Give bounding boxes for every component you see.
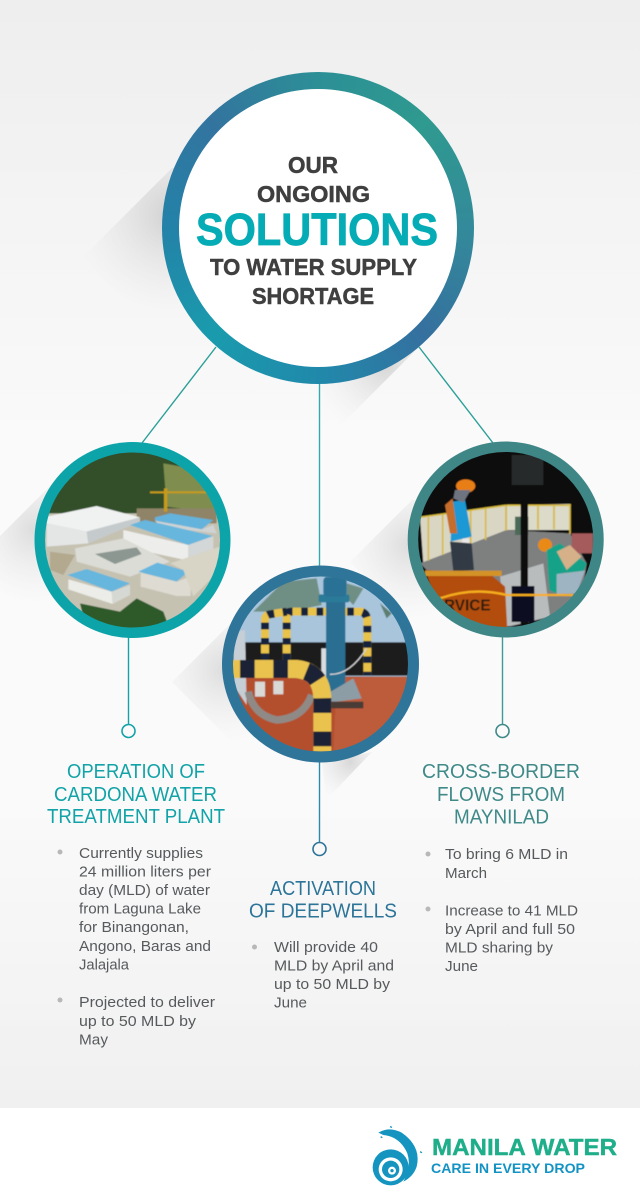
- photo circle: cross-border flows: RVICE: [444, 598, 491, 615]
- bullets: cross-border: [426, 846, 578, 975]
- title text: OUR: [288, 152, 338, 178]
- logo: Manila Water: [373, 1127, 617, 1185]
- photo circle: cross-border flows: [408, 442, 604, 640]
- column: Cardona treatment plant: [47, 761, 225, 1048]
- bullets: cross-border: MLD sharing by: [445, 940, 554, 956]
- bullets: deepwells: [252, 939, 394, 1012]
- bullets: Cardona: Currently supplies: [79, 845, 203, 862]
- bullets: Cardona: 24 million liters per: [79, 864, 211, 880]
- heading: Cardona: [47, 761, 225, 828]
- title text: SOLUTIONS: [196, 204, 438, 255]
- column: cross-border flows: [422, 761, 580, 975]
- connector end nodes: [122, 724, 509, 856]
- bullets: deepwells: up to 50 MLD by: [274, 976, 391, 993]
- title circle: [179, 89, 457, 367]
- bullets: Cardona: day (MLD) of water: [79, 882, 210, 899]
- title text: TO WATER SUPPLY: [210, 254, 417, 280]
- bullets: deepwells: MLD by April and: [274, 958, 394, 974]
- heading: Cardona: OPERATION OF: [67, 761, 205, 783]
- logo wordmark: MANILA WATER: [432, 1134, 617, 1160]
- bullets: Cardona: Angono, Baras and: [79, 938, 211, 955]
- bullets: cross-border: To bring 6 MLD in: [445, 846, 568, 863]
- long shadows behind circles: [0, 168, 480, 800]
- title text: ONGOING: [257, 181, 370, 207]
- heading: Cardona: TREATMENT PLANT: [47, 806, 225, 828]
- title ring: [162, 72, 474, 384]
- connector lines: [128, 347, 502, 842]
- heading: deepwells: OF DEEPWELLS: [249, 900, 397, 922]
- bullets: Cardona: May: [79, 1032, 109, 1048]
- heading: deepwells: [249, 878, 397, 922]
- bullets: Cardona: [58, 845, 215, 1048]
- heading: cross-border: MAYNILAD: [454, 806, 549, 828]
- heading: cross-border: CROSS-BORDER: [422, 761, 580, 783]
- logo tagline: CARE IN EVERY DROP: [431, 1160, 585, 1176]
- bullets: Cardona: Jalajala: [79, 956, 130, 974]
- bullets: cross-border: June: [445, 958, 478, 975]
- heading: deepwells: ACTIVATION: [270, 878, 376, 900]
- bullets: Cardona: from Laguna Lake: [79, 900, 201, 918]
- column: deepwells: [249, 878, 397, 1012]
- bullets: Cardona: up to 50 MLD by: [79, 1013, 197, 1030]
- heading: cross-border: FLOWS FROM: [437, 784, 565, 806]
- icon: water swirl: [373, 1127, 422, 1185]
- heading: Cardona: CARDONA WATER: [54, 784, 217, 806]
- photo circle: deepwells: [222, 566, 419, 763]
- heading: cross-border: [422, 761, 580, 828]
- bullets: cross-border: March: [445, 865, 487, 882]
- bullets: deepwells: Will provide 40: [274, 939, 378, 956]
- footer band: [0, 1108, 640, 1200]
- photo circle: Cardona water treatment plant: [34, 442, 230, 638]
- title text: SHORTAGE: [252, 283, 374, 309]
- bullets: cross-border: Increase to 41 MLD: [445, 902, 578, 920]
- bullets: cross-border: by April and full 50: [445, 921, 575, 938]
- bullets: deepwells: June: [274, 994, 307, 1012]
- bullets: Cardona: Projected to deliver: [79, 994, 215, 1011]
- bullets: Cardona: for Binangonan,: [79, 919, 189, 936]
- title text: [196, 152, 438, 309]
